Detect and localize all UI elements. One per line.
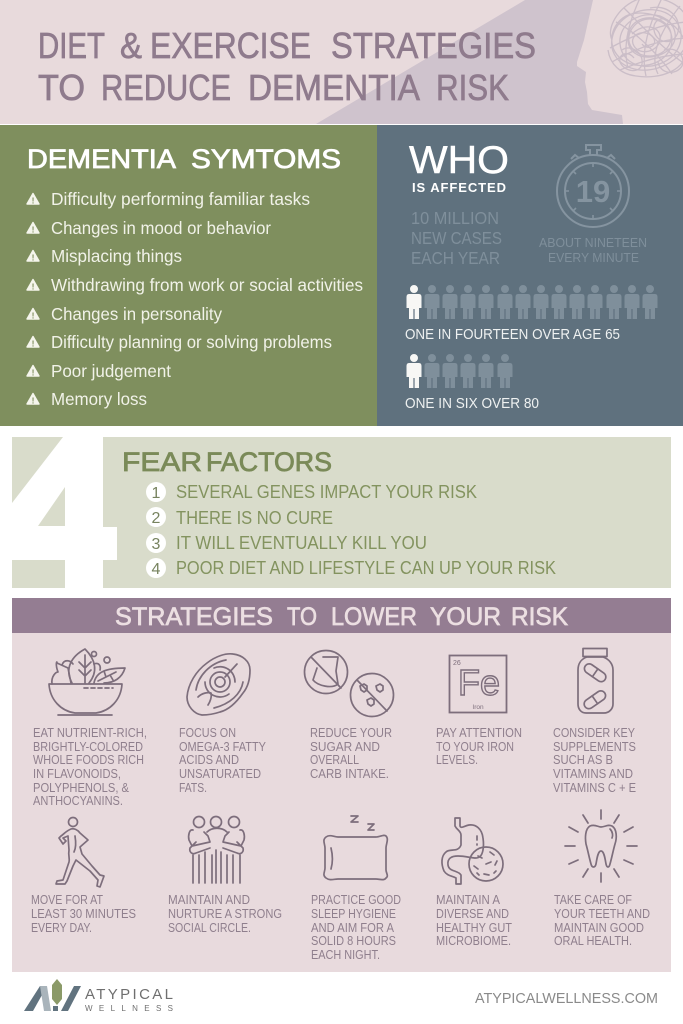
strategies heading bar: TO — [287, 603, 317, 631]
text: iron: TO YOUR IRON — [436, 740, 514, 754]
strategies heading bar: YOUR — [430, 603, 501, 631]
icon: iron element — [450, 656, 506, 712]
strategies heading bar — [12, 598, 671, 633]
strategies heading bar: LOWER — [331, 603, 417, 631]
text: social: NURTURE A STRONG — [168, 907, 282, 921]
title: TO — [38, 67, 85, 108]
icon: supplement bottle — [578, 648, 613, 713]
number badges: 1 — [152, 485, 161, 502]
text: sugar — [310, 726, 392, 781]
icon: three friends — [189, 816, 244, 883]
pictogram: one in fourteen — [406, 285, 658, 319]
number badges: 4 — [152, 561, 161, 578]
text: omega-3: UNSATURATED — [179, 767, 261, 781]
head silhouette shadow — [316, 0, 623, 124]
icon: salad bowl — [49, 649, 125, 715]
text: omega-3: OMEGA-3 FATTY — [179, 740, 267, 754]
text: sleep: EACH NIGHT. — [311, 948, 380, 962]
text: gut: DIVERSE AND — [436, 907, 509, 921]
icon: pillow — [324, 816, 387, 880]
title: DEMENTIA — [248, 67, 420, 108]
heading: who: WHO — [409, 139, 509, 182]
heading: dementia symtoms — [27, 144, 341, 174]
icon: iron element: 26 — [453, 660, 461, 667]
logo: atypical wellness: WELLNESS — [85, 1004, 173, 1013]
icon: stopwatch 19 — [557, 145, 629, 227]
warning icons — [27, 194, 39, 404]
text: social — [168, 893, 282, 935]
panel: fear factors — [12, 437, 671, 588]
symptom list: Changes in personality — [51, 304, 222, 324]
stat: about nineteen: EVERY MINUTE — [548, 250, 639, 265]
text: gut — [436, 893, 512, 948]
icon: shining tooth — [565, 810, 637, 882]
panel: strategies background — [12, 633, 671, 972]
symptom list: Difficulty planning or solving problems — [51, 332, 332, 352]
icon: iron element: Iron — [472, 704, 484, 711]
text: teeth: TAKE CARE OF — [554, 893, 632, 907]
panel: dementia symptoms — [0, 125, 377, 426]
heading: fear factors: FACTORS — [206, 447, 332, 477]
text: gut: MAINTAIN A — [436, 893, 501, 907]
text: eat nutrient-rich: EAT NUTRIENT-RICH, — [33, 726, 147, 740]
text: supplements: VITAMINS AND — [553, 767, 633, 781]
header band — [0, 0, 683, 124]
stat: 10 million: NEW CASES — [411, 228, 502, 248]
icon: gut microbiome — [442, 818, 503, 884]
panel: dementia symptoms: ! — [32, 396, 35, 406]
text: teeth: YOUR TEETH AND — [554, 907, 650, 921]
title: DIET — [38, 25, 105, 66]
text: supplements: CONSIDER KEY — [553, 726, 636, 740]
text: teeth: MAINTAIN GOOD — [554, 921, 644, 935]
number badges: 3 — [152, 536, 161, 553]
text: sugar: OVERALL — [310, 753, 359, 767]
icon: no bread and no sugar — [304, 650, 394, 716]
number badges: 2 — [152, 510, 161, 527]
title: RISK — [436, 67, 509, 108]
panel: dementia symptoms: ! — [32, 338, 35, 348]
text: social: SOCIAL CIRCLE. — [168, 921, 251, 935]
panel: dementia symptoms: ! — [32, 282, 35, 292]
text: sleep — [311, 893, 401, 962]
panel: dementia symptoms: ! — [32, 224, 35, 234]
text: sugar: CARB INTAKE. — [310, 767, 389, 781]
symptom list: Poor judgement — [51, 361, 171, 381]
panel: dementia symptoms: ! — [32, 196, 35, 206]
text: gut: MICROBIOME. — [436, 934, 511, 948]
text: gut: HEALTHY GUT — [436, 921, 512, 935]
text: omega-3: ACIDS AND — [179, 753, 239, 767]
symptom list: Withdrawing from work or social activities — [51, 275, 363, 295]
panel: dementia symptoms: ! — [32, 368, 35, 378]
symptom list: Memory loss — [51, 389, 147, 409]
title: EXERCISE — [150, 25, 311, 66]
strategies heading bar: RISK — [511, 603, 568, 631]
symptom list — [51, 189, 363, 409]
big numeral 4 — [12, 437, 117, 588]
text: sleep: PRACTICE GOOD — [311, 893, 401, 907]
text: iron: LEVELS. — [436, 753, 478, 767]
strategies heading bar: STRATEGIES — [115, 603, 273, 631]
text: eat nutrient-rich: POLYPHENOLS, & — [33, 781, 130, 795]
stat: about nineteen — [539, 235, 647, 265]
text: teeth — [554, 893, 650, 948]
logo: atypical wellness: ATYPICAL — [85, 986, 173, 1003]
fear factor list: IT WILL EVENTUALLY KILL YOU — [176, 533, 427, 553]
text: sleep: SLEEP HYGIENE — [311, 907, 396, 921]
heading: fear factors: FEAR — [122, 447, 202, 477]
text: omega-3: FATS. — [179, 781, 207, 795]
label: one in six: ONE IN SIX OVER 80 — [405, 396, 539, 412]
text: supplements: SUCH AS B — [553, 753, 613, 767]
text: eat nutrient-rich: BRIGHTLY-COLORED — [33, 740, 143, 754]
text: eat nutrient-rich: IN FLAVONOIDS, — [33, 767, 121, 781]
stat: 10 million: 10 MILLION — [411, 208, 499, 228]
icon: runner — [56, 818, 104, 887]
text: move: LEAST 30 MINUTES — [31, 907, 136, 921]
pictogram: one in six — [406, 354, 512, 388]
label: one in fourteen: ONE IN FOURTEEN OVER AGE 65 — [405, 327, 620, 343]
panel: dementia symptoms: ! — [32, 252, 35, 262]
panel: dementia symptoms: ! — [32, 310, 35, 320]
stat: 10 million — [411, 208, 502, 268]
text: supplements — [553, 726, 636, 795]
heading: fear factors — [122, 447, 332, 477]
text: social: MAINTAIN AND — [168, 893, 250, 907]
icon: iron element: Fe — [458, 662, 500, 703]
text: teeth: ORAL HEALTH. — [554, 934, 632, 948]
heading: dementia symtoms: DEMENTIA — [27, 144, 176, 174]
text: move: MOVE FOR AT — [31, 893, 103, 907]
panel: who is affected — [377, 125, 683, 426]
title: & — [120, 25, 142, 66]
text: sleep: AND AIM FOR A — [311, 921, 395, 935]
title — [38, 25, 536, 108]
text: omega-3: FOCUS ON — [179, 726, 236, 740]
title: STRATEGIES — [331, 25, 536, 66]
number badges — [146, 482, 166, 578]
fear factor list: POOR DIET AND LIFESTYLE CAN UP YOUR RISK — [176, 558, 556, 578]
fear factor list: SEVERAL GENES IMPACT YOUR RISK — [176, 482, 477, 502]
symptom list: Misplacing things — [51, 246, 182, 266]
text: move — [31, 893, 136, 935]
text: sugar: REDUCE YOUR — [310, 726, 392, 740]
fear factor list: THERE IS NO CURE — [176, 508, 333, 528]
logo: atypical wellness — [24, 979, 173, 1013]
text: supplements: SUPPLEMENTS — [553, 740, 636, 754]
title: REDUCE — [101, 67, 231, 108]
stat: 10 million: EACH YEAR — [411, 248, 500, 268]
website url: ATYPICALWELLNESS.COM — [475, 991, 658, 1007]
heading: dementia symtoms: SYMTOMS — [191, 144, 341, 174]
text: eat nutrient-rich: ANTHOCYANINS. — [33, 794, 123, 808]
symptom list: Changes in mood or behavior — [51, 218, 271, 238]
fear factor list — [176, 482, 556, 578]
text: move: EVERY DAY. — [31, 921, 92, 935]
subheading: is affected: IS AFFECTED — [412, 180, 506, 195]
text: iron — [436, 726, 522, 767]
icon: fish steak — [187, 654, 250, 715]
text: sugar: SUGAR AND — [310, 740, 380, 754]
text: eat nutrient-rich: WHOLE FOODS RICH — [33, 753, 144, 767]
text: eat nutrient-rich — [33, 726, 147, 808]
text: omega-3 — [179, 726, 267, 795]
text: iron: PAY ATTENTION — [436, 726, 522, 740]
text: supplements: VITAMINS C + E — [553, 781, 636, 795]
text: sleep: SOLID 8 HOURS — [311, 934, 396, 948]
scribble brain — [608, 0, 683, 77]
stat: about nineteen: ABOUT NINETEEN — [539, 235, 647, 250]
symptom list: Difficulty performing familiar tasks — [51, 189, 310, 209]
icon: stopwatch 19: 19 — [576, 174, 610, 209]
